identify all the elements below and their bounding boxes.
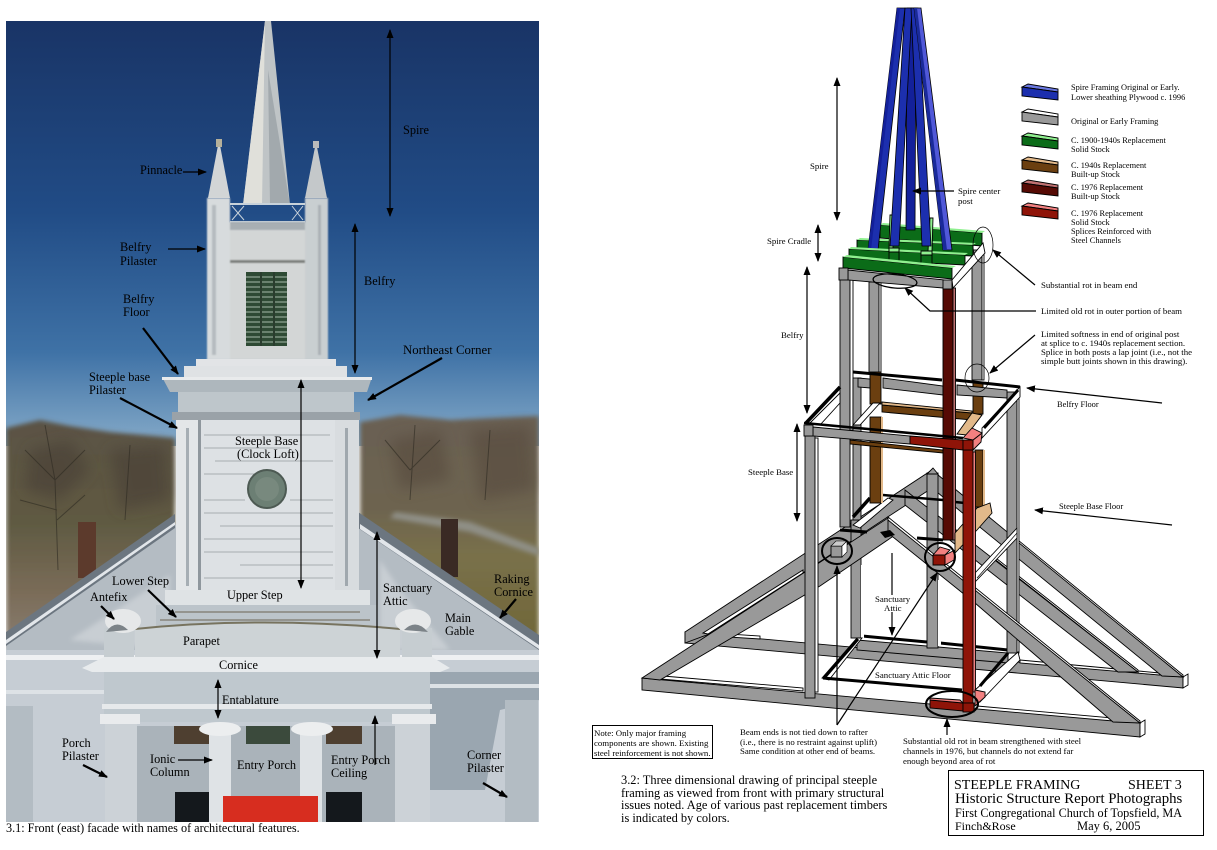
front plate (642, 676, 1145, 737)
rear plate and attic rear beam (685, 632, 1188, 688)
main gable (6, 524, 539, 650)
label: steeple base pilaster (89, 370, 177, 428)
label: steeple base pilaster: Pilaster (89, 383, 126, 397)
background trees and ground (6, 415, 539, 650)
porch pilasters and columns (100, 714, 140, 724)
label: belfry pilaster (120, 240, 205, 268)
legend: original framing (1022, 109, 1159, 126)
caption 3.2: issues noted. Age of various past replacement timbers (621, 798, 888, 812)
label: steeple base (235, 380, 301, 588)
legend: 1976 built-up: C. 1976 Replacement (1071, 183, 1144, 192)
antefixes (105, 609, 431, 633)
note: limited old rot: Limited old rot in outer portion of beam (1041, 306, 1182, 316)
old rot note (903, 736, 1082, 766)
label: corner pilaster (467, 748, 507, 797)
title block: First Congregational Church of Topsfield, MA (955, 806, 1182, 820)
rear rafters (685, 470, 1183, 677)
note: substantial rot: Substantial rot in beam end (1041, 280, 1138, 290)
legend: 1976 built-up (1022, 180, 1144, 201)
legend: original framing: Original or Early Framing (1071, 117, 1159, 126)
label: spire center post (913, 186, 1000, 206)
legend: 1900 to 1940s: Solid Stock (1071, 145, 1111, 154)
old rot note: Substantial old rot in beam strengthened with steel (903, 736, 1082, 746)
blue spire rafters (868, 8, 952, 250)
title block: SHEET 3 (1128, 778, 1182, 793)
label: raking cornice (494, 572, 533, 618)
note box: components are shown. Existing (594, 738, 709, 748)
label: spire center post: Spire center (958, 186, 1000, 196)
caption 3.2 (621, 773, 888, 825)
label: sanctuary attic floor: Sanctuary Attic Floor (875, 670, 951, 680)
label: raking cornice: Raking (494, 572, 530, 586)
label: belfry dimension: Belfry (781, 330, 804, 340)
panel: photograph of front facade (6, 21, 539, 822)
label: belfry floor: Floor (123, 305, 150, 319)
old rot note: channels in 1976, but channels do not extend far (903, 746, 1073, 756)
porch cornice (82, 657, 450, 672)
label: belfry pilaster: Pilaster (120, 254, 157, 268)
label: spire: Spire (403, 123, 429, 137)
note: limited softness: simple butt joints shown in this drawing). (1041, 356, 1187, 366)
steeple base cornice (164, 380, 371, 392)
label: main gable (445, 611, 475, 638)
old rot note: enough beyond area of rot (903, 756, 996, 766)
caption 3.2: framing as viewed from front with primary structural (621, 786, 885, 800)
balustrade (230, 204, 305, 222)
pinnacles (208, 147, 230, 198)
chart: three dimensional steeple framing drawing (642, 8, 1192, 737)
label: corner pilaster: Pilaster (467, 761, 504, 775)
note: limited softness (990, 329, 1192, 373)
title block: Historic Structure Report Photographs (955, 791, 1183, 807)
legend: 1976 solid (1022, 203, 1152, 245)
label: spire dimension: Spire (810, 161, 829, 171)
label: belfry: Belfry (364, 274, 396, 288)
legend: 1940s: Built-up Stock (1071, 170, 1121, 179)
label: raking cornice: Cornice (494, 585, 533, 599)
note box (592, 726, 712, 758)
red front post (963, 440, 976, 703)
label: belfry floor (123, 292, 178, 374)
label: entry porch ceiling (331, 716, 390, 780)
legend: spire framing (1022, 83, 1185, 102)
belfry (207, 198, 328, 360)
legend: spire framing: Spire Framing Original or Early. (1071, 83, 1180, 92)
spire cradle rear beams (880, 223, 985, 246)
red replacement beam (930, 690, 985, 712)
chimneys (78, 522, 96, 578)
steeple base wall (201, 420, 335, 590)
brown replacement posts and beams (850, 372, 985, 507)
label: northeast corner (368, 343, 492, 400)
spire center post (906, 8, 916, 230)
label: pinnacle (140, 163, 206, 177)
title block (948, 770, 1204, 836)
label: entry porch ceiling: Ceiling (331, 766, 367, 780)
label: sanctuary attic (377, 532, 433, 658)
label: steeple base: Steeple Base (235, 434, 299, 448)
legend: 1976 solid: C. 1976 Replacement (1071, 209, 1144, 218)
label: steeple base floor pointer: Steeple Base Floor (1059, 501, 1123, 511)
steeple base floor framing (840, 495, 1017, 582)
beam ends note (740, 727, 877, 756)
legend: 1900 to 1940s: C. 1900-1940s Replacement (1071, 136, 1166, 145)
caption 3.1: 3.1: Front (east) facade with names of architectural features. (6, 821, 300, 835)
caption 3.2: is indicated by colors. (621, 811, 730, 825)
label: steeple base pilaster: Steeple base (89, 370, 151, 384)
label: antefix (90, 590, 128, 619)
spire cradle middle beams (857, 215, 976, 256)
label: sanctuary attic: Sanctuary (383, 581, 433, 595)
title block: STEEPLE FRAMING (954, 778, 1080, 793)
red banner (223, 796, 318, 822)
beam ends note: Beam ends is not tied down to rafter (740, 727, 868, 737)
label: sanctuary attic dimension: Attic (884, 603, 902, 613)
label: steeple base dimension: Steeple Base (748, 467, 793, 477)
dark red post (943, 288, 956, 540)
label: pinnacle: Pinnacle (140, 163, 183, 177)
label: porch pilaster: Porch (62, 736, 91, 750)
label: spire cradle (767, 225, 818, 261)
label: belfry floor pointer: Belfry Floor (1057, 400, 1099, 409)
tan steeple base floor beam (955, 503, 992, 553)
label: antefix: Antefix (90, 590, 128, 604)
porch front wall (6, 650, 539, 822)
note: substantial rot (993, 250, 1138, 290)
clock roundel (248, 470, 286, 508)
legend: spire framing: Lower sheathing Plywood c. 1996 (1071, 93, 1185, 102)
label: entry porch ceiling: Entry Porch (331, 753, 390, 767)
label: sanctuary attic dimension (875, 553, 911, 635)
label: spire cradle: Spire Cradle (767, 236, 811, 246)
issue ellipses (822, 227, 993, 717)
label: belfry pilaster: Belfry (120, 240, 152, 254)
label: lower step: Lower Step (112, 574, 169, 588)
front beam of belfry floor (804, 423, 982, 450)
sky (6, 21, 539, 446)
note: limited softness: at splice to c. 1940s replacement section. (1041, 338, 1185, 348)
label: entry porch: Entry Porch (237, 758, 296, 772)
label: sanctuary attic: Attic (383, 594, 408, 608)
legend: 1976 solid: Solid Stock (1071, 218, 1111, 227)
label: porch pilaster (62, 736, 107, 777)
legend (1022, 83, 1185, 245)
note box: Note: Only major framing (594, 728, 687, 738)
rafter cubes (831, 541, 955, 565)
legend: 1976 built-up: Built-up Stock (1071, 192, 1121, 201)
spire cradle front beams (843, 247, 968, 279)
entablature (104, 690, 106, 694)
note: limited softness: Splice in both posts a lap joint (i.e., not the (1041, 347, 1192, 357)
note: limited old rot (905, 288, 1182, 316)
beam ends note: Same condition at other end of beams. (740, 746, 875, 756)
label: steeple base: (Clock Loft) (237, 447, 299, 461)
label: porch pilaster: Pilaster (62, 749, 99, 763)
label: steeple base floor pointer (1035, 501, 1172, 525)
belfry steps (196, 359, 336, 366)
raking cornice (6, 512, 539, 650)
label: cornice: Cornice (219, 658, 258, 672)
front left post (805, 436, 818, 698)
label: main gable: Main (445, 611, 471, 625)
legend: 1940s: C. 1940s Replacement (1071, 161, 1147, 170)
photo labels (62, 30, 533, 797)
note: limited softness: Limited softness in end of original post (1041, 329, 1180, 339)
front rafters (642, 517, 1140, 723)
porch interior (137, 726, 395, 822)
beam ends note: (i.e., there is no restraint against uplift) (740, 737, 877, 747)
label: steeple base dimension (748, 424, 797, 521)
note box: steel reinforcement is not shown. (594, 748, 711, 758)
label: lower step (112, 574, 176, 617)
legend: 1940s (1022, 157, 1147, 179)
belfry floor rear and sides (806, 372, 1020, 438)
steps and parapet (165, 590, 370, 605)
label: ionic column: Column (150, 765, 190, 779)
label: corner pilaster: Corner (467, 748, 501, 762)
label: entablature: Entablature (222, 693, 279, 707)
label: sanctuary attic dimension: Sanctuary (875, 594, 911, 604)
caption 3.2: 3.2: Three dimensional drawing of principal steeple (621, 773, 878, 787)
legend: 1976 solid: Steel Channels (1071, 236, 1121, 245)
note: beam end pointers (837, 566, 947, 735)
label: spire center post: post (958, 196, 973, 206)
legend: 1976 solid: Splices Reinforced with (1071, 227, 1152, 236)
legend: 1900 to 1940s (1022, 133, 1166, 154)
label: main gable: Gable (445, 624, 475, 638)
title block: May 6, 2005 (1077, 819, 1141, 833)
label: parapet: Parapet (183, 634, 220, 648)
spire (243, 21, 290, 205)
label: belfry floor: Belfry (123, 292, 155, 306)
attic floor frame (822, 638, 1020, 702)
louver window (246, 272, 287, 346)
label: belfry floor pointer (1027, 388, 1162, 409)
label: entablature (218, 680, 279, 718)
rear and upper posts (840, 250, 1019, 653)
top belfry frame (839, 243, 985, 289)
label: northeast corner: Northeast Corner (403, 343, 492, 357)
label: ionic column: Ionic (150, 752, 176, 766)
title block: Finch&Rose (955, 819, 1016, 833)
label: upper step: Upper Step (227, 588, 283, 602)
label: ionic column (150, 752, 212, 779)
